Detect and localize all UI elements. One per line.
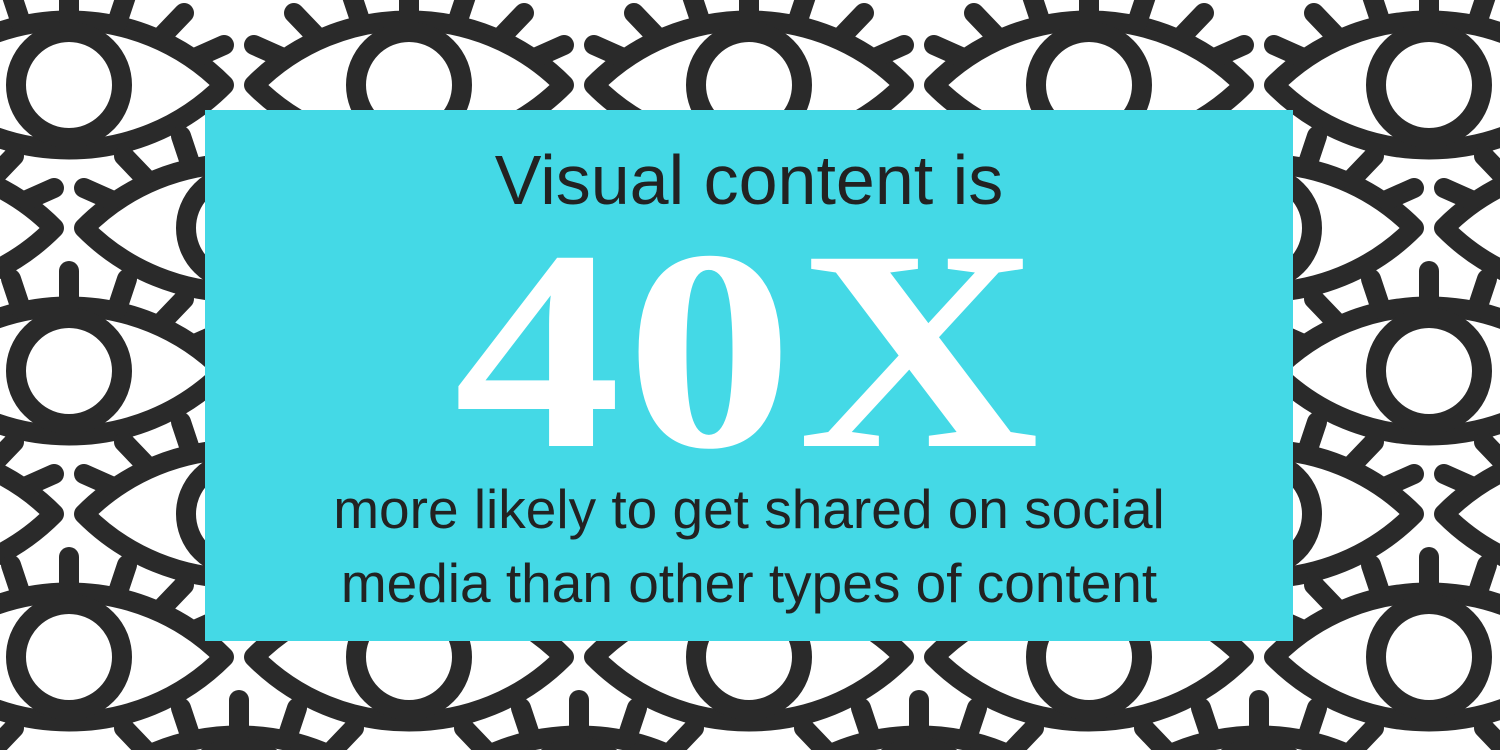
heading: Visual content is: [495, 141, 1003, 219]
text block: description: media than other types of content: [341, 552, 1157, 614]
big number: 40X: [454, 191, 1044, 508]
panel: cyan stat box: [205, 110, 1293, 641]
text block: description: more likely to get shared on social: [333, 478, 1165, 540]
text block: description: [333, 478, 1165, 614]
